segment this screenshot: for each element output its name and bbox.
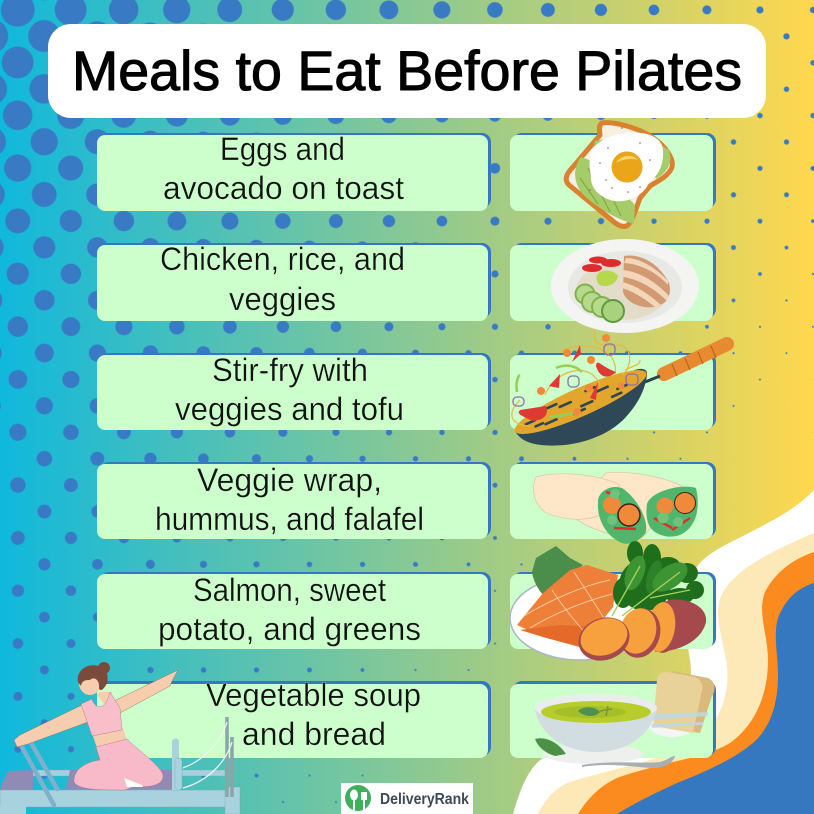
title banner: Meals to Eat Before Pilates <box>72 39 742 102</box>
logo: DeliveryRank: DeliveryRank <box>380 791 469 808</box>
icon: vegetable soup and bread <box>535 671 715 768</box>
row 3: stir-fry with veggies and tofu <box>97 352 716 430</box>
icon: salmon, sweet potato and greens <box>510 541 706 668</box>
icon: stir-fry wok <box>509 330 727 446</box>
row 5: salmon, sweet potato, and greens: potato, and greens <box>158 611 421 647</box>
row 3: stir-fry with veggies and tofu: veggies and tofu <box>175 391 404 427</box>
icon: egg and avocado toast <box>566 123 672 226</box>
row 6: vegetable soup and bread <box>97 677 716 758</box>
title banner <box>48 24 766 118</box>
row 2: chicken, rice, and veggies: veggies <box>229 281 336 317</box>
row 5: salmon, sweet potato, and greens <box>97 572 716 649</box>
row 5: salmon, sweet potato, and greens: Salmon, sweet <box>193 572 386 608</box>
illustration: woman doing pilates on reformer <box>0 662 240 814</box>
row 4: veggie wrap, hummus, and falafel <box>97 462 716 539</box>
row 4: veggie wrap, hummus, and falafel: Veggie wrap, <box>197 462 382 498</box>
row 1: eggs and avocado on toast <box>97 131 716 211</box>
woman figure <box>14 662 178 790</box>
row 1: eggs and avocado on toast: Eggs and <box>220 131 345 167</box>
row 6: vegetable soup and bread: Vegetable soup <box>206 677 421 713</box>
row 3: stir-fry with veggies and tofu: Stir-fry with <box>212 352 368 388</box>
row 1: eggs and avocado on toast: avocado on toast <box>163 170 404 206</box>
logo: DeliveryRank <box>341 783 473 814</box>
row 4: veggie wrap, hummus, and falafel: hummus, and falafel <box>155 501 424 537</box>
decorative waves bottom right <box>513 490 814 814</box>
row 6: vegetable soup and bread: and bread <box>242 716 386 752</box>
row 2: chicken, rice, and veggies <box>97 241 716 321</box>
row 2: chicken, rice, and veggies: Chicken, rice, and <box>160 241 405 277</box>
reformer machine <box>0 717 240 814</box>
icon: chicken rice and veggies plate <box>551 239 699 333</box>
icon: veggie wrap <box>533 472 698 544</box>
